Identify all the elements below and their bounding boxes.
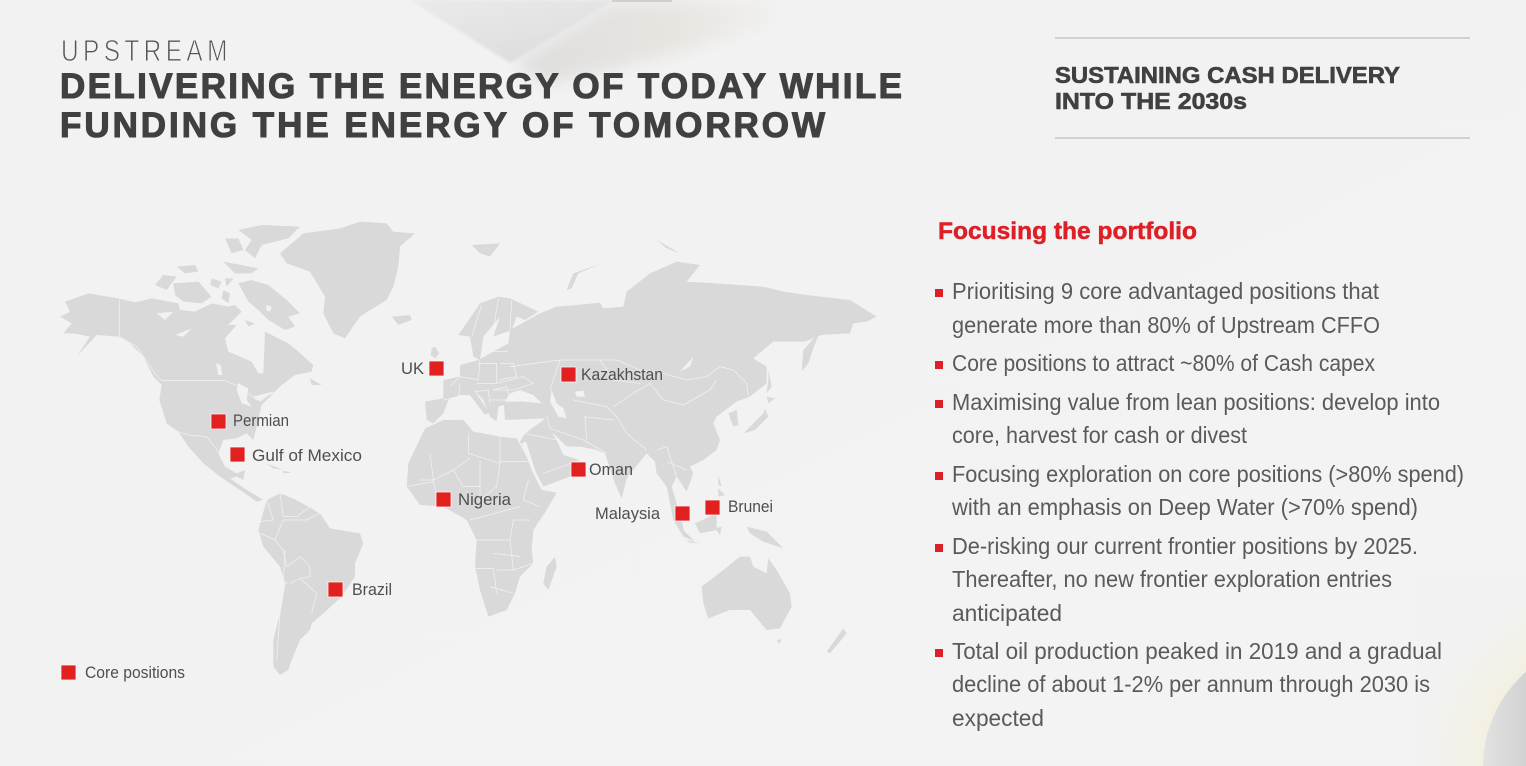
- bullet 5: [935, 533, 1418, 626]
- bullet 1: generate more than 80% of Upstream CFFO: [952, 312, 1380, 338]
- bullet 4: Focusing exploration on core positions (>80% spend): [952, 461, 1464, 487]
- marker: Brunei: Brunei: [728, 498, 773, 516]
- subtitle box: [1055, 38, 1470, 138]
- marker: Permian: [211, 412, 289, 430]
- bullet 1: [935, 278, 1380, 338]
- marker: Nigeria: [436, 491, 512, 509]
- marker: Permian: Permian: [233, 412, 289, 430]
- bullet 3: [935, 389, 1440, 448]
- marker: Brazil: [328, 581, 392, 599]
- marker: Kazakhstan: Kazakhstan: [581, 366, 663, 384]
- legend: core positions: Core positions: [85, 664, 185, 682]
- marker: Gulf of Mexico: Gulf of Mexico: [252, 447, 362, 465]
- bullet 6: decline of about 1-2% per annum through 2030 is: [952, 671, 1430, 697]
- bullet 6: expected: [952, 705, 1044, 731]
- bullet 6: [935, 638, 1442, 731]
- bullet 5: anticipated: [952, 600, 1062, 626]
- marker: Brunei: [705, 498, 773, 516]
- bullet 3: core, harvest for cash or divest: [952, 422, 1248, 448]
- subtitle line 2: INTO THE 2030s: [1055, 88, 1247, 114]
- title block: [60, 33, 902, 145]
- bullet 4: [935, 461, 1464, 520]
- marker: Brazil: Brazil: [352, 581, 392, 599]
- subtitle line 1: SUSTAINING CASH DELIVERY: [1055, 62, 1400, 88]
- marker: Oman: [571, 461, 633, 479]
- bullet list: [935, 278, 1464, 731]
- marker: Malaysia: Malaysia: [595, 505, 661, 523]
- map: Europe, Africa, Asia, Oceania: [400, 233, 877, 653]
- marker: Malaysia: [595, 505, 690, 523]
- section heading: Focusing the portfolio: [938, 218, 1197, 245]
- bullet 5: Thereafter, no new frontier exploration entries: [952, 566, 1392, 592]
- bullet 2: Core positions to attract ~80% of Cash capex: [952, 350, 1375, 376]
- map: Americas: [60, 222, 415, 675]
- marker: Oman: Oman: [589, 461, 633, 479]
- marker: Nigeria: Nigeria: [458, 491, 512, 509]
- world map: [60, 222, 877, 675]
- bullet 6: Total oil production peaked in 2019 and a gradual: [952, 638, 1442, 664]
- bullet 5: De-risking our current frontier positions by 2025.: [952, 533, 1418, 559]
- bullet 3: Maximising value from lean positions: develop into: [952, 389, 1440, 415]
- heading line 2: FUNDING THE ENERGY OF TOMORROW: [60, 106, 825, 145]
- bullet 4: with an emphasis on Deep Water (>70% spend): [951, 494, 1418, 520]
- marker: UK: [401, 360, 444, 378]
- heading line 1: DELIVERING THE ENERGY OF TODAY WHILE: [60, 67, 902, 106]
- bullet 1: Prioritising 9 core advantaged positions that: [952, 278, 1380, 304]
- eyebrow: Upstream: UPSTREAM: [61, 33, 227, 68]
- marker: UK: UK: [401, 360, 424, 378]
